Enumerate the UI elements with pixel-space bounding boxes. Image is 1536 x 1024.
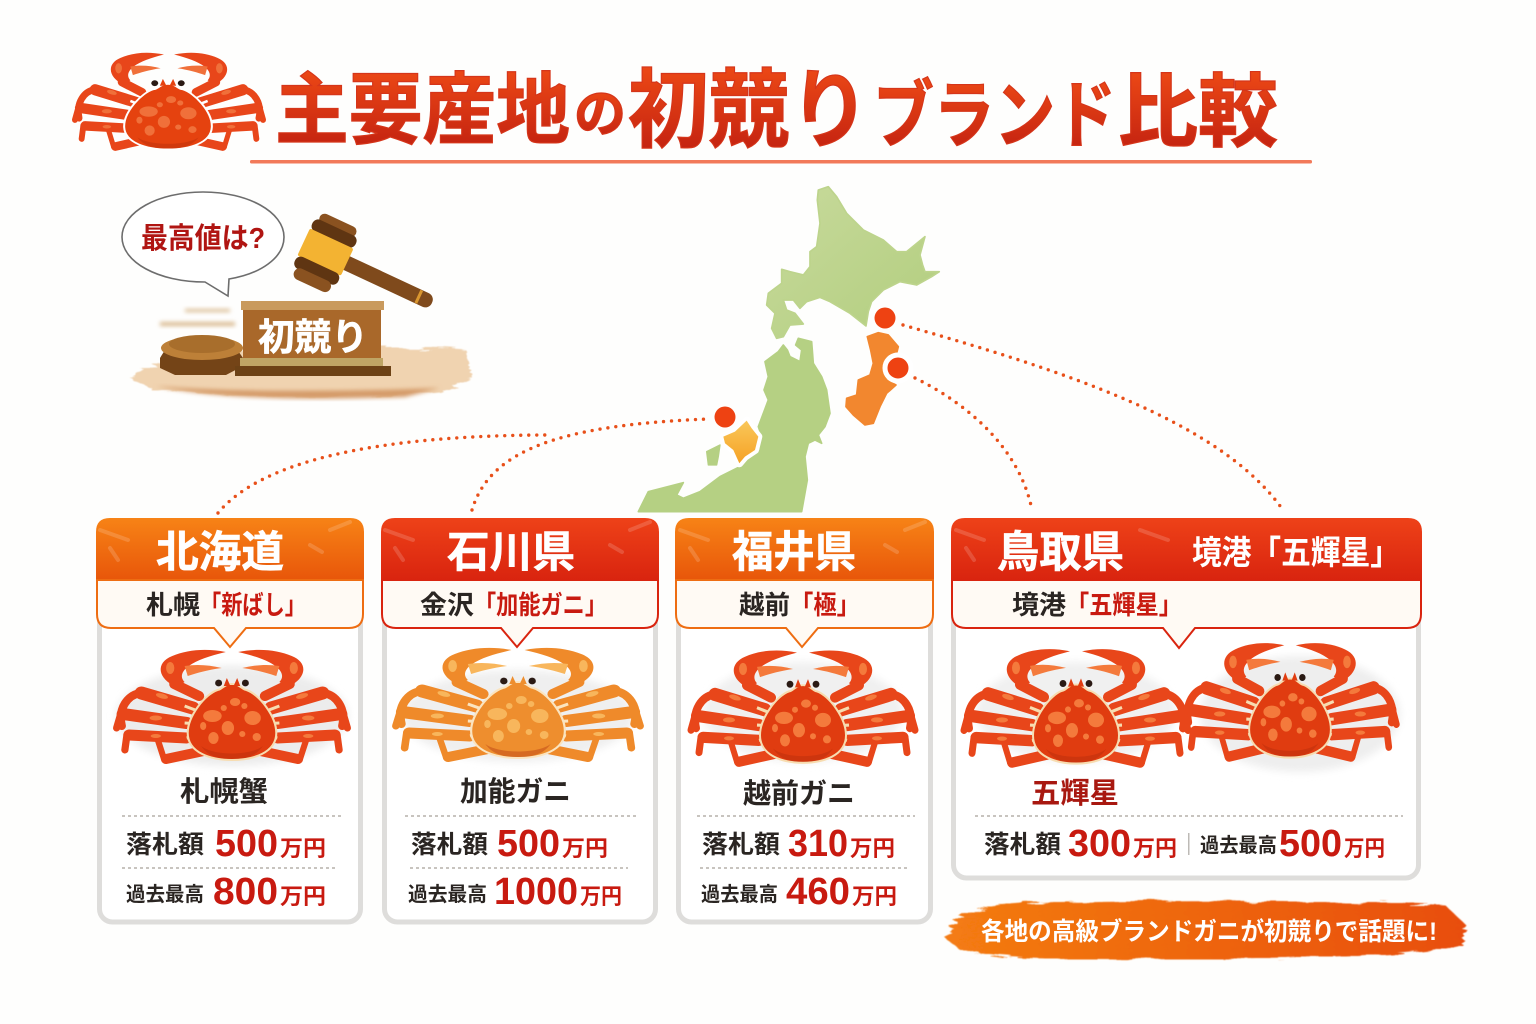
winning bid: Tottori bbox=[984, 823, 1177, 865]
winning bid: Hokkaido: 500 bbox=[215, 823, 278, 865]
record high: Tottori: 万円 bbox=[1344, 836, 1385, 861]
callout banner bbox=[945, 901, 1466, 959]
connector: Tottori bbox=[903, 325, 1283, 510]
label: Ishikawa: 石川県 bbox=[447, 529, 575, 577]
panel: Ishikawa bbox=[381, 518, 659, 922]
record high: Ishikawa: 過去最高 bbox=[408, 883, 487, 906]
record high: Hokkaido bbox=[126, 871, 326, 913]
header: Fukui bbox=[675, 518, 934, 580]
header brand: Tottori: 境港「五輝星」 bbox=[1192, 534, 1400, 571]
record high: Fukui: 460 bbox=[786, 871, 850, 913]
crab name: Fukui: 越前ガニ bbox=[743, 778, 855, 809]
brand text: Tottori: 「五輝星」 bbox=[1066, 590, 1182, 620]
winning bid: Hokkaido bbox=[126, 823, 326, 865]
map: yellow region bbox=[723, 421, 758, 463]
winning bid: Ishikawa: 落札額 bbox=[411, 831, 488, 859]
map marker: west bbox=[714, 406, 736, 428]
connector: Fukui bbox=[915, 378, 1032, 510]
winning bid: Fukui: 万円 bbox=[850, 836, 895, 861]
crab name: Ishikawa: 加能ガニ bbox=[460, 776, 571, 807]
map of Japan bbox=[638, 187, 939, 512]
brand text: Tottori bbox=[1012, 590, 1182, 620]
title: 初競り bbox=[628, 63, 870, 159]
speech bubble bbox=[122, 192, 284, 296]
auction block bbox=[235, 301, 391, 376]
brand text: Hokkaido: 「新ばし」 bbox=[200, 590, 306, 620]
title underline bbox=[250, 160, 1312, 164]
winning bid: Ishikawa bbox=[411, 823, 608, 865]
connector: Hokkaido bbox=[218, 435, 550, 513]
winning bid: Hokkaido: 落札額 bbox=[126, 831, 204, 859]
winning bid: Tottori: 300 bbox=[1068, 823, 1131, 865]
connector: Ishikawa bbox=[472, 419, 708, 510]
record high: Fukui bbox=[701, 871, 897, 913]
brand text: Hokkaido: 札幌 bbox=[146, 590, 200, 620]
winning bid: Hokkaido: 万円 bbox=[280, 836, 326, 861]
winning bid: Ishikawa: 500 bbox=[497, 823, 560, 865]
record high: Ishikawa: 1000 bbox=[494, 871, 578, 913]
panel: Fukui bbox=[675, 518, 934, 922]
record high: Tottori: 500 bbox=[1279, 823, 1342, 865]
icon: title crab bbox=[75, 53, 263, 149]
label: Hokkaido: 北海道 bbox=[156, 529, 284, 577]
brand text: Ishikawa: 「加能ガニ」 bbox=[474, 590, 607, 620]
crab name: Tottori: 五輝星 bbox=[1031, 777, 1119, 810]
title: 比較 bbox=[1118, 68, 1278, 157]
icon: sound block bbox=[160, 335, 243, 375]
map marker: east bbox=[885, 355, 911, 381]
brand box: Hokkaido bbox=[97, 580, 363, 647]
brand text: Hokkaido bbox=[146, 590, 306, 620]
title: ブランド bbox=[873, 74, 1116, 157]
crab: Hokkaido bbox=[116, 650, 348, 766]
winning bid: Tottori: 万円 bbox=[1133, 836, 1177, 861]
winning bid: Ishikawa: 万円 bbox=[562, 836, 608, 861]
record high: Hokkaido: 万円 bbox=[280, 884, 326, 909]
winning bid: Fukui bbox=[702, 823, 895, 865]
header: Hokkaido bbox=[96, 518, 364, 580]
header: Tottori bbox=[951, 518, 1422, 580]
speech bubble: 最高値は? bbox=[141, 222, 265, 255]
callout banner: 各地の高級ブランドガニが初競りで話題に! bbox=[981, 917, 1437, 946]
panel: Tottori bbox=[951, 518, 1422, 878]
title bbox=[275, 63, 1278, 159]
record high: Ishikawa bbox=[408, 871, 622, 913]
crab: Tottori right bbox=[1184, 643, 1400, 772]
record high: Tottori bbox=[1200, 823, 1385, 865]
brand box: Ishikawa bbox=[382, 580, 658, 647]
winning bid: Fukui: 落札額 bbox=[702, 831, 780, 859]
record high: Hokkaido: 過去最高 bbox=[126, 883, 204, 906]
winning bid: Fukui: 310 bbox=[788, 823, 848, 865]
record high: Fukui: 万円 bbox=[852, 884, 897, 909]
crab name: Hokkaido: 札幌蟹 bbox=[180, 776, 268, 807]
brand text: Ishikawa: 金沢 bbox=[420, 590, 474, 620]
map: small island bbox=[707, 445, 720, 465]
icon: motion lines bbox=[160, 309, 235, 326]
map marker: north bbox=[874, 308, 896, 328]
auction block: 初競り bbox=[258, 317, 368, 358]
icon: gavel bbox=[288, 210, 447, 335]
record high: Ishikawa: 万円 bbox=[580, 884, 622, 909]
map: orange region bbox=[846, 333, 898, 425]
crab: Fukui bbox=[691, 651, 915, 763]
brand box: Tottori bbox=[952, 580, 1421, 648]
brand text: Fukui: 「極」 bbox=[790, 590, 860, 620]
label: Tottori: 鳥取県 bbox=[997, 529, 1124, 577]
map: Honshu bbox=[638, 338, 830, 512]
map: Hokkaido bbox=[767, 187, 939, 338]
crab: Tottori left bbox=[964, 649, 1188, 764]
record high: Tottori: 過去最高 bbox=[1200, 834, 1277, 857]
label: Fukui: 福井県 bbox=[732, 529, 856, 577]
brand text: Ishikawa bbox=[420, 590, 607, 620]
title: 主要産地 bbox=[275, 66, 570, 154]
crab: Ishikawa bbox=[396, 648, 640, 762]
header: Ishikawa bbox=[381, 518, 659, 580]
auction table smear bbox=[130, 347, 472, 399]
panel: Hokkaido bbox=[96, 518, 364, 922]
brand text: Fukui: 越前 bbox=[739, 590, 790, 620]
record high: Hokkaido: 800 bbox=[213, 871, 278, 913]
title: の bbox=[574, 86, 626, 144]
brand text: Tottori: 境港 bbox=[1012, 590, 1066, 620]
winning bid: Tottori: 落札額 bbox=[984, 831, 1061, 859]
brand box: Fukui bbox=[676, 580, 933, 647]
record high: Fukui: 過去最高 bbox=[701, 883, 778, 906]
brand text: Fukui bbox=[739, 590, 860, 620]
